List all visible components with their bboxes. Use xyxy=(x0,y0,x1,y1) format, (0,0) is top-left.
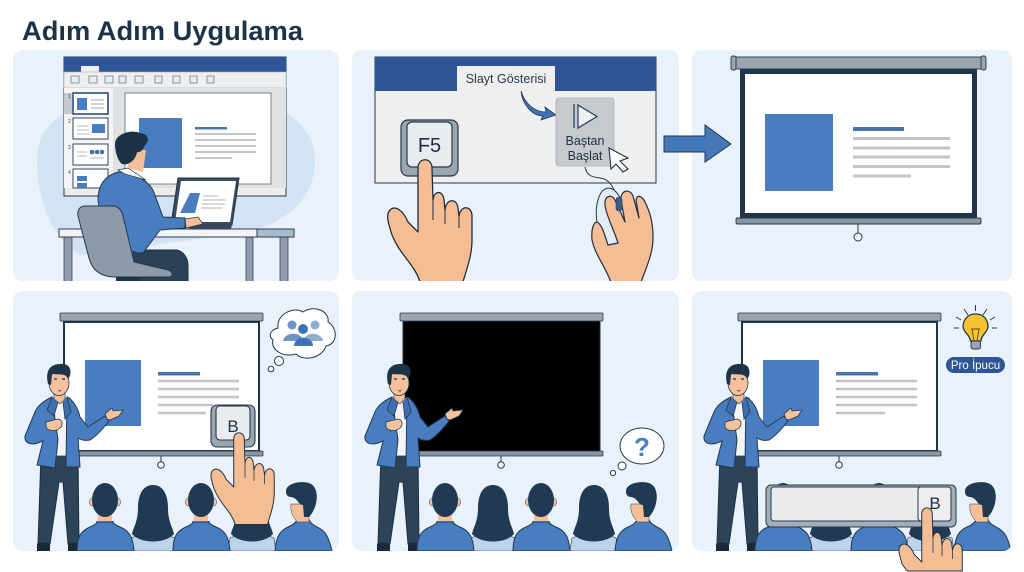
title: Adım Adım Uygulama xyxy=(22,16,304,46)
audience xyxy=(417,482,672,551)
black screen xyxy=(400,313,603,468)
application window xyxy=(64,57,286,196)
hand pressing B xyxy=(211,433,274,524)
long key bar and B key: B xyxy=(929,494,941,513)
curved arrow xyxy=(521,91,556,120)
cursor xyxy=(609,148,628,172)
application window: 3 xyxy=(68,145,71,151)
application window: 4 xyxy=(68,170,71,176)
hand on mouse xyxy=(585,167,653,285)
projector screen xyxy=(731,56,986,241)
ribbon window xyxy=(375,57,656,183)
presenter xyxy=(365,364,463,551)
presenter xyxy=(25,364,123,551)
audience xyxy=(77,482,332,551)
pro tip badge xyxy=(946,357,1005,373)
thought bubble: question: ? xyxy=(634,432,650,462)
start button xyxy=(556,98,614,166)
thought bubble: audience xyxy=(268,309,335,372)
thought bubble: question xyxy=(610,428,664,476)
lightbulb xyxy=(954,305,997,349)
screen xyxy=(60,313,263,468)
F5 key xyxy=(401,120,458,176)
panel: B key white screen xyxy=(13,291,339,551)
F5 key: F5 xyxy=(418,135,441,157)
B key xyxy=(211,405,255,447)
B key: B xyxy=(227,417,239,436)
start button: Baştan xyxy=(566,134,605,148)
start button: Başlat xyxy=(568,149,603,163)
panel: B key black screen xyxy=(352,291,679,551)
presenter xyxy=(704,364,802,551)
person at desk xyxy=(98,132,203,285)
application window: 1 xyxy=(68,94,71,100)
panel: presenter at desk xyxy=(13,50,339,285)
laptop xyxy=(171,178,239,229)
pro tip badge: Pro İpucu xyxy=(951,359,1000,372)
hand pressing F5 xyxy=(388,160,472,282)
application window: 2 xyxy=(68,119,71,125)
arrow to screen xyxy=(664,125,731,162)
audience xyxy=(755,482,1011,551)
panel: F5 and start from beginning xyxy=(352,50,679,285)
long key bar and B key xyxy=(766,485,956,527)
screen xyxy=(738,313,941,468)
tab label: Slayt Gösterisi xyxy=(466,72,546,86)
slide content xyxy=(139,118,256,168)
chair xyxy=(78,206,172,285)
hand pressing bar xyxy=(899,508,962,571)
desk xyxy=(59,229,294,285)
panel: pro tip xyxy=(692,291,1012,551)
panel: projected slide xyxy=(692,50,1012,281)
